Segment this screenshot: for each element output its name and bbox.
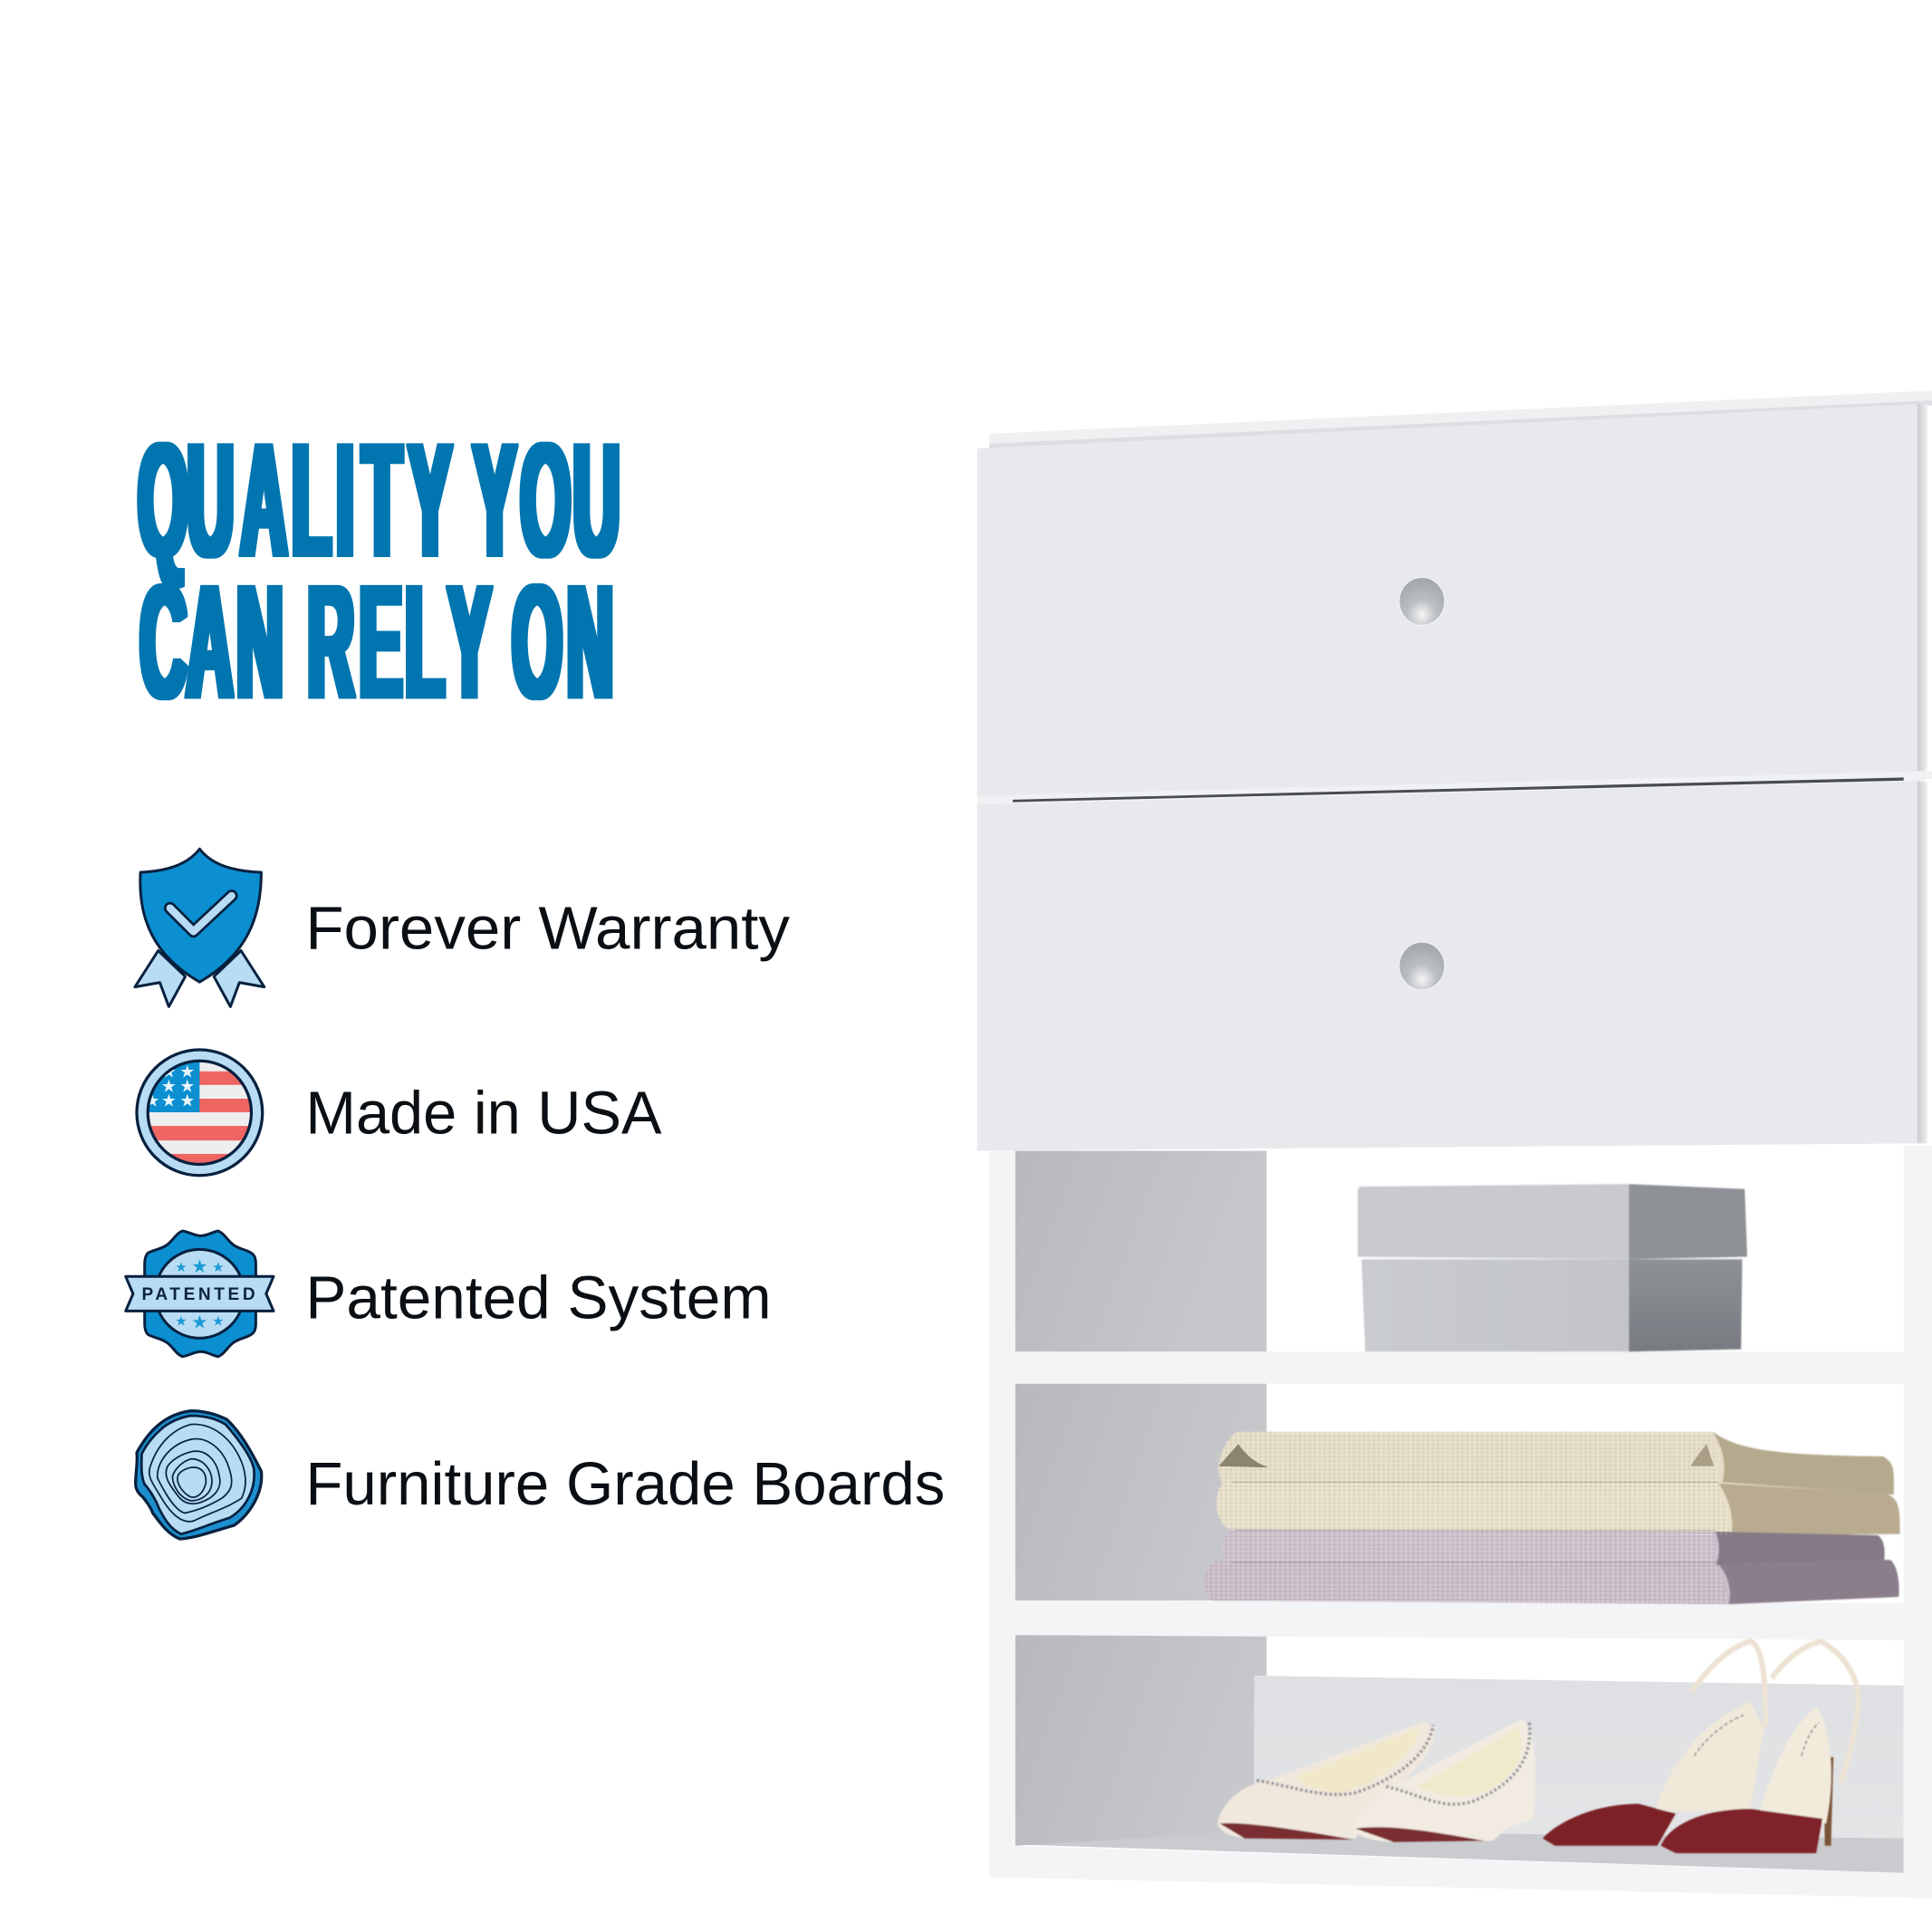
stiletto [1823,1757,1833,1846]
label: furniture grade boards: Furniture Grade Boards [305,1451,945,1518]
icon: patented seal: ★ [175,1259,187,1275]
drawer gap [1013,777,1904,803]
feature list [126,849,945,1539]
icon: patented seal: ★ [212,1259,224,1275]
headline [138,409,620,732]
mauve lower towel [1205,1560,1899,1604]
beige top towel [1218,1432,1894,1495]
beige lower towel [1216,1484,1900,1535]
icon: wood rings [136,1411,262,1539]
icon: usa flag badge: ★ [179,1091,195,1111]
lower drawer [977,781,1927,1151]
page canvas [124,391,1932,1898]
folded towels [1205,1432,1900,1604]
icon: usa flag badge: ★ [179,1076,195,1096]
label: forever warranty: Forever Warranty [305,895,791,962]
label: made in usa: Made in USA [305,1081,662,1148]
towel fold shadows [1218,1444,1719,1562]
icon: patented seal: PATENTED [141,1285,255,1304]
knob [1399,577,1445,625]
icon: patented seal: ★ [191,1255,208,1277]
band between drawers [977,772,1932,804]
towel weave overlay [1205,1432,1731,1604]
cabinet sides and shelves [989,1146,1932,1898]
high heels [1543,1641,1859,1853]
upper drawer [977,404,1927,796]
inner side panels [1015,1151,1266,1846]
right upper [1760,1706,1831,1823]
straps [1692,1641,1859,1783]
label: patented system: Patented System [305,1265,772,1332]
flat shoes [1217,1719,1535,1842]
icon: usa flag badge: ★ [161,1076,177,1096]
icon: usa flag badge: ★ [161,1062,177,1082]
icon: patented seal [126,1231,274,1357]
right flat [1353,1719,1535,1842]
top strip [989,390,1932,448]
headline: QUALITY YOU [138,409,620,591]
mauve upper towel [1222,1529,1885,1567]
knob [1399,942,1445,990]
icon: usa flag badge: ★ [161,1091,177,1111]
icon: patented seal: ★ [175,1313,187,1330]
hat box [1358,1184,1747,1351]
bottom shelf floor [1015,1831,1904,1873]
icon: usa flag badge: ★ [179,1062,195,1082]
headline: CAN RELY ON [140,551,613,732]
icon: usa flag badge: ★ [144,1091,160,1111]
icon: usa flag badge [137,1050,263,1176]
cabinet [977,390,1932,1898]
back panel of bottom shelf [1254,1676,1904,1842]
icon: warranty shield [135,849,264,1006]
left upper [1655,1702,1764,1812]
red toes [1543,1804,1676,1846]
icon: patented seal: ★ [191,1311,208,1332]
left flat [1217,1721,1435,1839]
icon: patented seal: ★ [212,1313,224,1330]
